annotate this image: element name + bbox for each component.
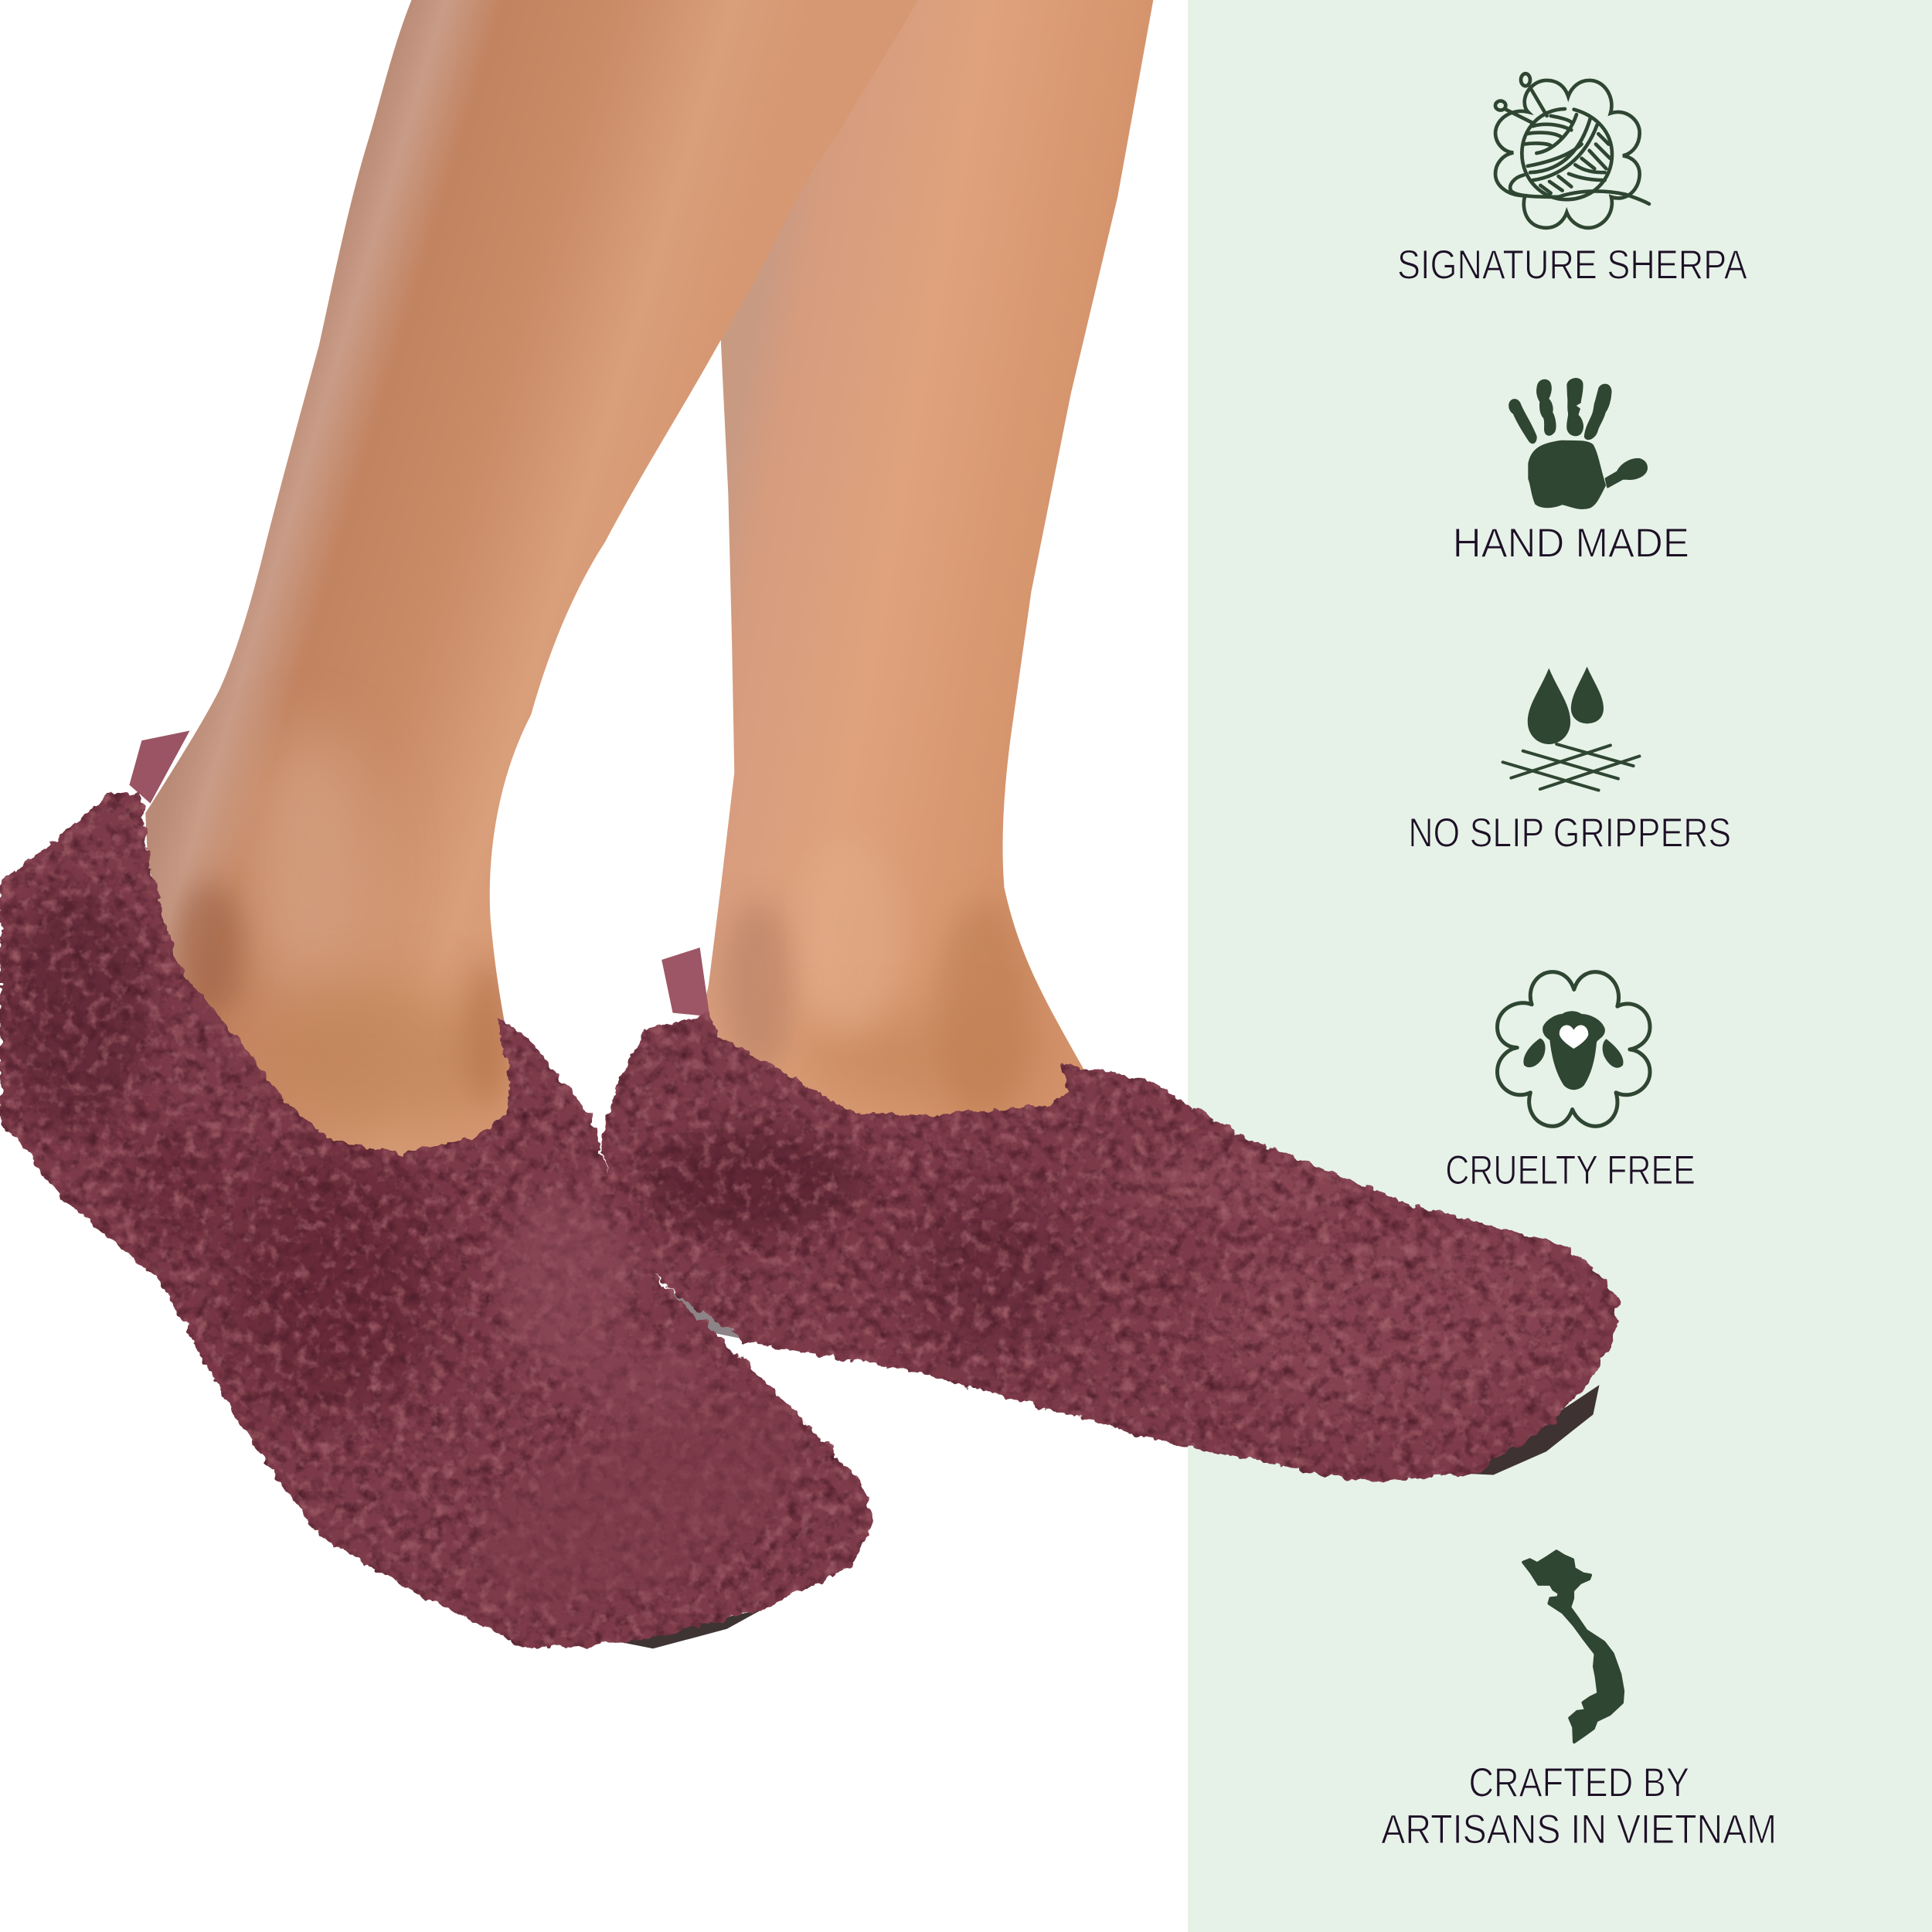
tab: right slipper pull loop (662, 947, 709, 1016)
feature: no slip grippers (1408, 667, 1731, 855)
right slipper (600, 1014, 1617, 1484)
feature: signature sherpa (1397, 73, 1747, 287)
photo: legs wearing sherpa slippers (0, 0, 1617, 1648)
sole: left slipper (616, 1609, 763, 1648)
sole: right slipper (1466, 1385, 1600, 1475)
label: CRAFTED BY (1469, 1760, 1689, 1806)
icon: sheep in flower (1497, 972, 1650, 1126)
tab: left slipper pull loop (129, 730, 190, 804)
label: NO SLIP GRIPPERS (1408, 810, 1731, 855)
label: ARTISANS IN VIETNAM (1381, 1807, 1777, 1852)
highlight: smooth toe and vamp of left slipper (488, 1186, 818, 1600)
icon: yarn ball in flower (1495, 73, 1649, 228)
label: CRUELTY FREE (1445, 1148, 1696, 1193)
icon: hand print (1509, 379, 1647, 509)
right leg (706, 0, 1153, 1117)
label: SIGNATURE SHERPA (1397, 242, 1747, 287)
left slipper (0, 791, 873, 1648)
icon: drops on grip lines (1503, 667, 1639, 791)
left leg (123, 0, 937, 1183)
panel: features background (1188, 0, 1932, 1932)
label: HAND MADE (1453, 521, 1689, 566)
feature: crafted by artisans in vietnam (1381, 1551, 1777, 1852)
feature: hand made (1453, 379, 1689, 566)
shadow: right slipper underside (669, 1290, 752, 1341)
icon: map of Vietnam (1523, 1551, 1623, 1742)
feature: cruelty free (1445, 972, 1696, 1193)
